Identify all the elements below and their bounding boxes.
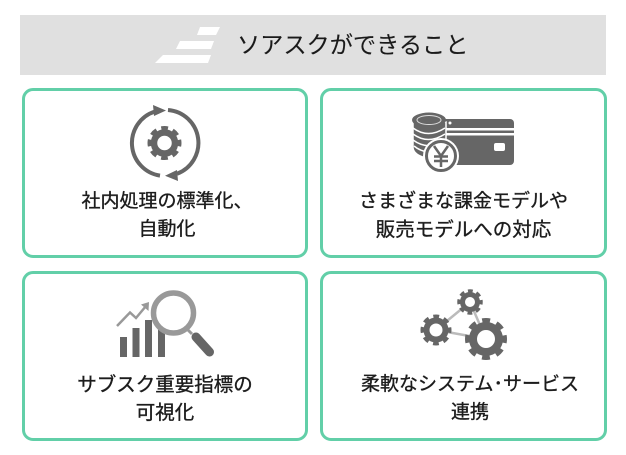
panel: internal process	[22, 88, 308, 258]
label: サブスク重要指標の	[77, 374, 253, 396]
label	[77, 374, 253, 424]
icon: rotating gear	[130, 105, 200, 181]
label	[359, 190, 568, 241]
label: さまざまな課金モデルや	[359, 191, 568, 212]
label: 連携	[451, 402, 489, 423]
panel: system integration	[320, 271, 607, 441]
icon: coins and card	[412, 112, 514, 172]
label: 柔軟なシステム･サービス	[361, 374, 579, 395]
label	[361, 374, 579, 423]
icon: connected gears	[420, 289, 507, 360]
label: 社内処理の標準化、	[81, 191, 252, 212]
label: 可視化	[136, 402, 194, 424]
title: ソアスクができること	[237, 32, 468, 58]
header band	[20, 15, 606, 75]
logo mark	[155, 27, 220, 63]
panel: billing models	[320, 88, 607, 258]
label: 販売モデルへの対応	[376, 219, 551, 241]
label	[81, 190, 252, 240]
panel: KPI visualisation	[22, 271, 308, 441]
icon: chart and magnifier	[116, 290, 214, 357]
label: 自動化	[138, 219, 196, 240]
